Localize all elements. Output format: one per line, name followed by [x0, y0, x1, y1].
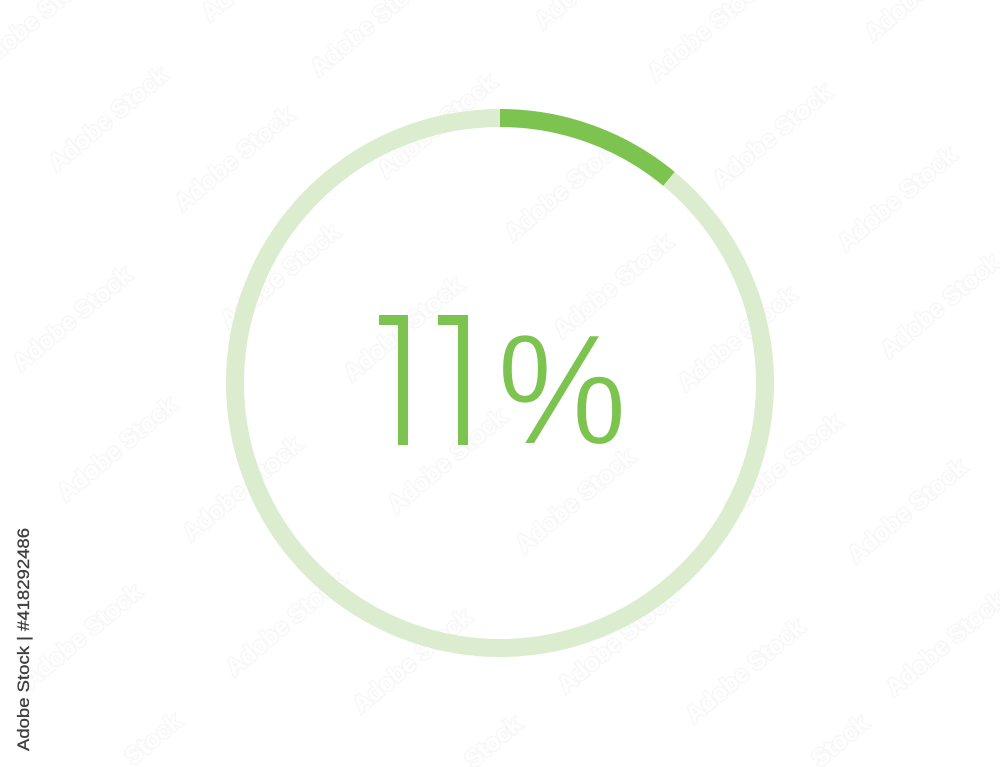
- watermark pattern: Adobe Stock: [680, 613, 811, 729]
- watermark pattern: Adobe Stock: [220, 566, 351, 682]
- watermark pattern: Adobe Stock: [52, 391, 183, 507]
- watermark pattern: Adobe Stock: [499, 131, 630, 247]
- percentage value: 1: [407, 274, 513, 486]
- watermark pattern: Adobe Stock: [382, 403, 513, 519]
- watermark pattern: Adobe Stock: [552, 583, 683, 699]
- watermark pattern: Adobe Stock: [338, 271, 469, 387]
- watermark pattern: Adobe Stock: [177, 431, 308, 547]
- progress ring track: [235, 118, 765, 648]
- stock id caption: Adobe Stock | #418292486: [14, 528, 33, 751]
- watermark pattern: Adobe Stock: [17, 578, 148, 694]
- watermark pattern: Adobe Stock: [7, 261, 138, 377]
- watermark pattern: Adobe Stock: [43, 61, 174, 177]
- percentage value: 1: [347, 274, 453, 486]
- percentage value: [379, 315, 621, 445]
- watermark pattern: Adobe Stock: [707, 78, 838, 194]
- watermark pattern: Adobe Stock: [347, 603, 478, 719]
- progress ring 11 percent arc: [500, 118, 669, 179]
- watermark pattern: Adobe Stock: [548, 228, 679, 344]
- watermark pattern: Adobe Stock: [372, 68, 503, 184]
- watermark pattern: Adobe Stock: [832, 141, 963, 257]
- watermark pattern: Adobe Stock: [169, 101, 300, 217]
- watermark pattern: Adobe Stock: [717, 408, 848, 524]
- watermark pattern: Adobe Stock: [672, 281, 803, 397]
- watermark pattern: Adobe Stock: [215, 218, 346, 334]
- watermark pattern: Adobe Stock: [842, 453, 973, 569]
- percentage value: %: [497, 302, 627, 478]
- watermark pattern: Adobe Stock: [510, 443, 641, 559]
